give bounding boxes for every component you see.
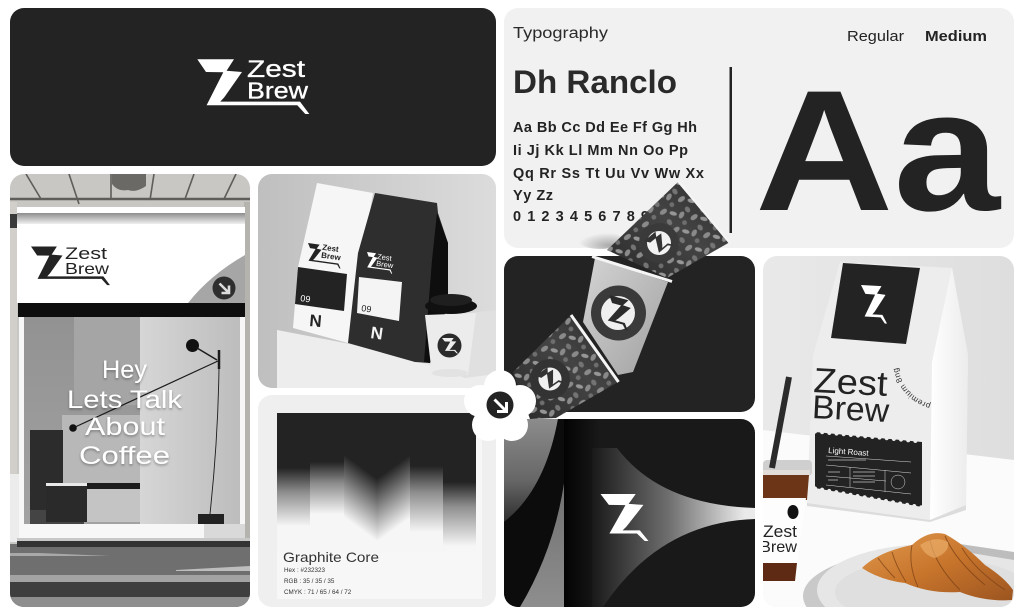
heading: Typography: Typography <box>513 25 608 42</box>
shop window <box>19 317 245 540</box>
font name: Dh Ranclo <box>513 64 677 100</box>
paper coffee bag <box>807 263 968 522</box>
panel: cups background <box>504 256 755 412</box>
label table <box>826 456 911 494</box>
lower cup pattern <box>513 315 618 419</box>
dark cabinet <box>30 430 63 510</box>
large specimen Aa: Aa <box>755 55 1001 247</box>
cup wordmark <box>760 522 797 556</box>
bag Z mark <box>859 285 889 324</box>
panel: bag and croissant photo <box>763 256 1014 607</box>
iced coffee cup <box>760 377 812 581</box>
swatch name: Graphite Core <box>283 549 379 565</box>
black bag logo mark <box>367 252 392 274</box>
stone wall <box>10 202 250 542</box>
cup Z badge <box>788 505 798 519</box>
cup wordmark: Brew <box>760 539 797 556</box>
black bag wordmark: Zest <box>377 252 393 263</box>
middle cup rim <box>592 256 672 282</box>
panel: typography <box>504 8 1014 248</box>
ceiling ornament <box>112 174 146 191</box>
arrow icon <box>486 392 514 418</box>
white coffee bag <box>293 183 373 343</box>
black bag monogram: N <box>369 323 384 344</box>
patterned cup: top <box>607 181 730 278</box>
white bag monogram: N <box>309 311 323 331</box>
logo wordmark <box>247 56 308 104</box>
glyph specimen: Ii Jj Kk Ll Mm Nn Oo Pp <box>513 143 688 159</box>
plate <box>803 544 1024 615</box>
bag dark square <box>831 263 920 344</box>
logo mark <box>197 59 309 114</box>
black bag label <box>357 277 402 321</box>
window message: Coffee <box>79 442 170 470</box>
floor lamp <box>69 339 224 524</box>
gradient swatch <box>277 413 476 553</box>
swatch values: CMYK : 71 / 65 / 64 / 72 <box>284 589 352 596</box>
glyph specimen: Qq Rr Ss Tt Uu Vv Ww Xx <box>513 166 704 182</box>
glyph specimen: 0 1 2 3 4 5 6 7 8 9 <box>513 209 649 225</box>
sign wordmark <box>66 248 109 274</box>
logo wordmark: Zest <box>247 56 305 83</box>
sign arrow badge <box>212 276 236 300</box>
ceiling beams <box>10 174 250 204</box>
glyph specimen: Yy Zz <box>513 188 553 204</box>
white Z mark <box>600 494 648 541</box>
divider <box>730 67 732 233</box>
black bag wordmark: Brew <box>376 259 394 270</box>
bag wordmark: Zest <box>813 361 889 404</box>
bag wordmark: Brew <box>811 388 890 429</box>
middle cup logo badge <box>591 286 646 340</box>
sign wordmark: Brew <box>65 261 110 278</box>
white bag logo mark <box>308 243 340 269</box>
cup wordmark: Zest <box>763 522 797 541</box>
weight labels: Regular <box>847 29 904 45</box>
logo wordmark: Brew <box>247 78 308 104</box>
bench <box>46 483 140 522</box>
panel: textured logo <box>504 419 755 607</box>
glyph specimen <box>513 120 704 225</box>
sign corner wedge <box>188 255 245 303</box>
light fan <box>592 448 755 607</box>
weight labels: Medium <box>925 29 987 45</box>
lower cup logo badge <box>530 359 570 399</box>
sign board <box>17 207 245 303</box>
swatch values: RGB : 35 / 35 / 35 <box>284 578 335 585</box>
panel: coffee bags photo <box>258 174 496 388</box>
panel: colour swatch <box>258 395 496 607</box>
sign wordmark: Zest <box>65 244 107 263</box>
table <box>763 430 1014 607</box>
patterned cup: bottom <box>513 315 618 419</box>
cup logo badge <box>438 334 462 358</box>
takeaway cup <box>425 294 477 377</box>
window message: About <box>85 413 165 441</box>
straw <box>772 377 789 468</box>
white bag label <box>295 267 347 311</box>
swatch values <box>284 567 352 596</box>
window message: Hey <box>102 356 147 384</box>
black bag wordmark <box>376 254 394 268</box>
sign logo mark <box>31 246 110 285</box>
dark band <box>504 419 567 607</box>
bag info label <box>815 432 922 508</box>
grey crescent <box>520 484 564 607</box>
black vertical band <box>564 419 600 607</box>
swatch values: Hex : #232323 <box>284 567 325 574</box>
black fascia <box>18 303 245 317</box>
curved tagline <box>896 354 931 404</box>
paper coffee bag: premium 8ng <box>894 368 931 408</box>
grey upper-left shape <box>504 419 558 522</box>
croissant <box>862 533 1013 600</box>
white bag wordmark: Brew <box>321 251 342 262</box>
cup pattern <box>607 182 730 278</box>
pavement <box>10 538 250 607</box>
window message <box>67 356 183 470</box>
label heading: Light Roast <box>828 446 870 458</box>
panel: storefront photo <box>10 174 250 607</box>
white bag wordmark: Zest <box>322 243 340 254</box>
white bag wordmark <box>321 244 341 260</box>
lower cup rim <box>571 315 618 382</box>
weight labels <box>847 29 987 45</box>
display plinth <box>277 330 488 388</box>
panel: logo <box>10 8 496 166</box>
window message: Lets Talk <box>67 386 183 414</box>
black coffee bag <box>348 193 448 363</box>
top cup logo badge <box>639 223 679 263</box>
top cup rim <box>678 181 730 243</box>
plain cup: middle <box>583 256 672 375</box>
bag wordmark <box>811 361 892 429</box>
black bag label number: 09 <box>361 303 372 314</box>
glyph specimen: Aa Bb Cc Dd Ee Ff Gg Hh <box>513 120 697 136</box>
white bag label number: 09 <box>300 293 311 304</box>
flower badge with arrow <box>464 370 536 441</box>
cup shadow on typography panel <box>578 231 622 249</box>
